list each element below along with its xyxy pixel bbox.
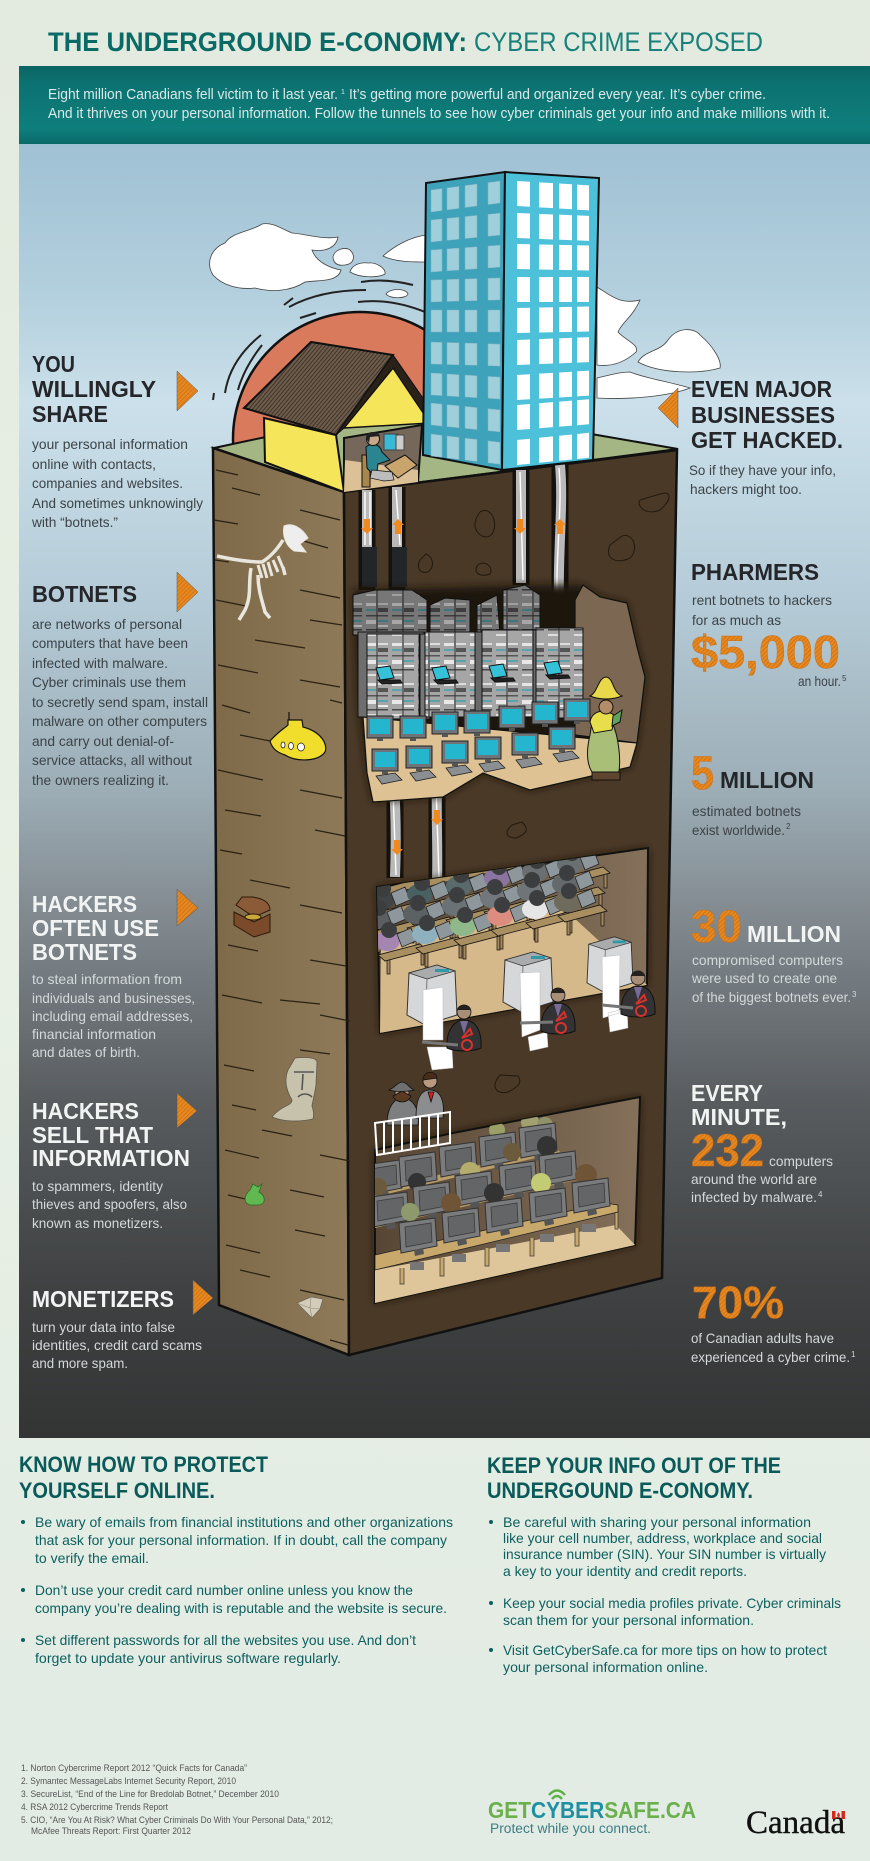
illustration: office tower [423, 172, 599, 470]
icon: treasure chest [234, 897, 270, 937]
stat: 5 million: estimated botnets [692, 803, 801, 819]
bullet list: Visit GetCyberSafe.ca for more tips on how to protect [503, 1642, 827, 1658]
panel: keep your info out [487, 1453, 841, 1675]
stat: 70 percent: 70% [692, 1277, 784, 1328]
footnotes: 3. SecureList, “End of the Line for Bredolab Botnet,” December 2010 [21, 1789, 279, 1800]
text block: you willingly share [31, 351, 203, 530]
stat: 5 million [691, 746, 814, 838]
cave halo [353, 585, 645, 802]
monetizer rows [364, 1113, 618, 1284]
text block: you willingly share: YOU [32, 351, 75, 377]
illustration: hacker room [372, 844, 656, 1070]
bullet list: Be careful with sharing your personal information [503, 1514, 811, 1530]
stat: pharmers $5,000: for as much as [692, 612, 781, 628]
text block: you willingly share: online with contacts, [32, 456, 156, 472]
text block: hackers often use botnets: OFTEN USE [32, 915, 159, 941]
stat: 70 percent: of Canadian adults have [691, 1330, 834, 1346]
stat: 30 million: 30 [691, 901, 742, 952]
logo: canada wordmark: Canada [746, 1805, 845, 1841]
illustration: ground block [213, 402, 678, 1355]
icon: setting sun [233, 312, 487, 566]
bullet list: Don’t use your credit card number online unless you know the [35, 1582, 413, 1598]
stat: 70 percent: 1 [851, 1350, 856, 1359]
cave monitors [367, 699, 590, 784]
bullet list: scan them for your personal information. [503, 1612, 754, 1628]
stat: every minute 232: computers [769, 1153, 833, 1169]
heading: YOURSELF ONLINE. [19, 1478, 215, 1503]
illustration: server cave [353, 585, 645, 802]
bullet list: Keep your social media profiles private. Cyber criminals [503, 1595, 841, 1611]
icon: money bag [245, 1184, 264, 1205]
stat: pharmers $5,000 [691, 559, 847, 689]
stat: pharmers $5,000: rent botnets to hackers [692, 592, 832, 608]
house left wall [264, 418, 344, 492]
text block: you willingly share: WILLINGLY [32, 376, 156, 402]
stat: 30 million: of the biggest botnets ever. [692, 989, 851, 1005]
hacker rows [377, 856, 611, 974]
tower windows right [517, 181, 589, 465]
text block: monetizers [32, 1286, 202, 1371]
arrow: botnets [177, 572, 198, 612]
panel: intro band: And it thrives on your personal information. Follow the tunnels to see how cyber criminals get your info and make millions with it. [48, 106, 830, 122]
bullet list [21, 1514, 453, 1666]
text block: even major businesses: hackers might too. [690, 481, 802, 497]
text block: botnets: malware on other computers [32, 713, 207, 729]
icon: motion lines [213, 281, 425, 400]
ground top [214, 402, 678, 492]
icon: wifi arcs [549, 1790, 565, 1799]
text block: monetizers: and more spam. [32, 1355, 128, 1371]
text block: botnets: and carry out denial-of- [32, 733, 174, 749]
paper-cutting men [422, 971, 655, 1051]
back server racks [353, 585, 540, 635]
arrow: you willingly share [177, 371, 198, 411]
block left face [213, 448, 349, 1355]
text block: hackers often use botnets: individuals and businesses, [32, 990, 195, 1006]
stat: 30 million: MILLION [747, 921, 841, 947]
stat: 30 million: 3 [852, 990, 857, 999]
printers and paper [407, 937, 633, 1070]
title: CYBER CRIME EXPOSED [474, 27, 763, 57]
arrow: hackers often use botnets [177, 889, 198, 926]
cave wall [575, 585, 645, 743]
heading: UNDERGOUND E-CONOMY. [487, 1478, 753, 1503]
stat: every minute 232 [691, 1080, 833, 1205]
icon: clouds [210, 224, 720, 399]
room [344, 425, 422, 492]
footnotes: 1. Norton Cybercrime Report 2012 “Quick Facts for Canada” [21, 1763, 247, 1774]
text block: hackers often use botnets [32, 891, 195, 1060]
text block: monetizers: MONETIZERS [32, 1286, 174, 1312]
text block: botnets: Cyber criminals use them [32, 674, 186, 690]
bullet list: Be wary of emails from financial institutions and other organizations [35, 1514, 453, 1530]
footnotes: 2. Symantec MessageLabs Internet Security Report, 2010 [21, 1776, 236, 1787]
text block: hackers often use botnets: including email addresses, [32, 1008, 193, 1024]
stat: 30 million: were used to create one [691, 970, 837, 986]
stat: 5 million: 2 [786, 822, 791, 831]
stat: 70 percent [691, 1277, 856, 1365]
icon: yellow submarine [270, 712, 326, 760]
title [48, 27, 763, 57]
gable [344, 368, 430, 428]
block right face [344, 450, 677, 1355]
stat: every minute 232: 232 [691, 1125, 764, 1176]
text block: even major businesses [689, 376, 843, 497]
stat: every minute 232: infected by malware. [691, 1189, 817, 1205]
panel: know how to protect yourself [19, 1452, 453, 1666]
footnotes: McAfee Threats Report: First Quarter 2012 [31, 1826, 191, 1837]
panel: intro band: 1 [341, 89, 345, 96]
text block: hackers often use botnets: to steal information from [32, 971, 182, 987]
stat: 30 million [691, 901, 857, 1005]
title: THE UNDERGROUND E-CONOMY: [48, 27, 467, 57]
text block: hackers sell that information [32, 1098, 190, 1231]
text block: hackers often use botnets: HACKERS [32, 891, 137, 917]
footnotes: 4. RSA 2012 Cybercrime Trends Report [21, 1802, 168, 1813]
icon: diamond [297, 1297, 323, 1318]
text block: monetizers: turn your data into false [32, 1319, 175, 1335]
text block: botnets: to secretly send spam, install [32, 694, 208, 710]
bullet list: forget to update your antivirus software regularly. [35, 1650, 341, 1666]
panel: intro band: It’s getting more powerful and organized every year. It’s cyber crime. [349, 87, 766, 103]
text block: you willingly share: companies and websites. [32, 475, 183, 491]
logo: getcybersafe [488, 1790, 696, 1836]
stat: pharmers $5,000: an hour. [798, 673, 841, 689]
bullet list: insurance number (SIN). Your SIN number is virtually [503, 1546, 826, 1562]
bullet list: like your cell number, address, workplace and social [503, 1530, 822, 1546]
railing [375, 1112, 450, 1155]
text block: even major businesses: BUSINESSES [691, 402, 835, 428]
stat: 70 percent: experienced a cyber crime. [691, 1349, 850, 1365]
logo: getcybersafe: GETCYBERSAFE.CA [488, 1797, 696, 1823]
stat: every minute 232: MINUTE, [691, 1104, 787, 1130]
text block: hackers sell that information: known as monetizers. [32, 1215, 163, 1231]
panel: intro band: Eight million Canadians fell victim to it last year. [48, 87, 338, 103]
panel: sky background [19, 144, 870, 1438]
cave floor [363, 717, 637, 802]
stat: every minute 232: around the world are [691, 1171, 817, 1187]
text block: botnets: BOTNETS [32, 581, 137, 607]
panel: intro band [19, 66, 870, 144]
text block: botnets [32, 581, 208, 788]
stat: 30 million: compromised computers [692, 952, 843, 968]
footnotes [21, 1763, 333, 1837]
text block: botnets: are networks of personal [32, 616, 182, 632]
pharmer figure [588, 677, 622, 780]
text block: you willingly share: SHARE [32, 401, 108, 427]
text block: even major businesses: EVEN MAJOR [691, 376, 832, 402]
icon: tunnel arrows [361, 519, 566, 855]
text block: hackers sell that information: HACKERS [32, 1098, 139, 1124]
heading: KNOW HOW TO PROTECT [19, 1452, 268, 1477]
illustration: house [244, 342, 441, 492]
illustration: tunnels [362, 465, 561, 880]
text block: hackers often use botnets: and dates of birth. [32, 1044, 140, 1060]
rack laptops [376, 661, 570, 684]
front server racks [358, 628, 583, 719]
text block: you willingly share: with “botnets.” [31, 514, 118, 530]
rocks [418, 493, 669, 1093]
stat: 5 million: 5 [691, 746, 714, 799]
arrow: major businesses [658, 388, 678, 428]
icon: moai head [272, 1057, 317, 1121]
heading: KEEP YOUR INFO OUT OF THE [487, 1453, 781, 1478]
text block: botnets: service attacks, all without [32, 752, 192, 768]
stat: 5 million: exist worldwide. [692, 822, 785, 838]
bullet list [489, 1514, 841, 1675]
desk and computer user [362, 432, 417, 487]
text block: hackers sell that information: SELL THAT [32, 1122, 154, 1148]
text block: botnets: the owners realizing it. [32, 772, 169, 788]
bullet list: a key to your identity and credit reports. [503, 1563, 747, 1579]
bullet list: Set different passwords for all the websites you use. And don’t [35, 1632, 416, 1648]
text block: even major businesses: GET HACKED. [691, 427, 843, 453]
text block: monetizers: identities, credit card scams [32, 1337, 202, 1353]
text block: you willingly share: your personal information [32, 436, 188, 452]
stat: pharmers $5,000: $5,000 [691, 626, 840, 678]
stat: every minute 232: 4 [818, 1190, 823, 1199]
text block: you willingly share: And sometimes unknowingly [32, 495, 203, 511]
bullet list: that ask for your personal information. If in doubt, call the company [35, 1532, 447, 1548]
illustration: monetizer room [364, 1072, 640, 1303]
roof [244, 342, 393, 435]
text block: hackers sell that information: to spammers, identity [32, 1178, 163, 1194]
stat: pharmers $5,000: PHARMERS [691, 559, 819, 585]
heading [19, 1452, 268, 1503]
arrow: monetizers [193, 1280, 213, 1315]
soil strokes [214, 470, 350, 1345]
logo: getcybersafe: Protect while you connect. [490, 1821, 651, 1836]
arrow: hackers sell [177, 1093, 197, 1128]
bullet list: your personal information online. [503, 1659, 708, 1675]
bullet list: to verify the email. [35, 1550, 149, 1566]
stat: every minute 232: EVERY [691, 1080, 763, 1106]
tower windows left [431, 181, 500, 464]
text block: hackers sell that information: INFORMATION [32, 1145, 190, 1171]
heading [487, 1453, 781, 1503]
text block: hackers sell that information: thieves and spoofers, also [32, 1196, 187, 1212]
text block: hackers often use botnets: BOTNETS [32, 939, 137, 965]
icon: t-rex skeleton [217, 525, 308, 620]
footnotes: 5. CIO, “Are You At Risk? What Cyber Criminals Do With Your Personal Data,” 2012; [21, 1815, 333, 1826]
text block: even major businesses: So if they have your info, [689, 462, 836, 478]
stat: 5 million: MILLION [720, 767, 814, 793]
stat: pharmers $5,000: 5 [842, 674, 847, 683]
bullet list: company you’re dealing with is reputable and the website is secure. [35, 1600, 447, 1616]
text block: botnets: computers that have been [32, 635, 188, 651]
text block: hackers often use botnets: financial information [32, 1026, 156, 1042]
text block: botnets: infected with malware. [32, 655, 168, 671]
monetizer figures [387, 1072, 443, 1125]
